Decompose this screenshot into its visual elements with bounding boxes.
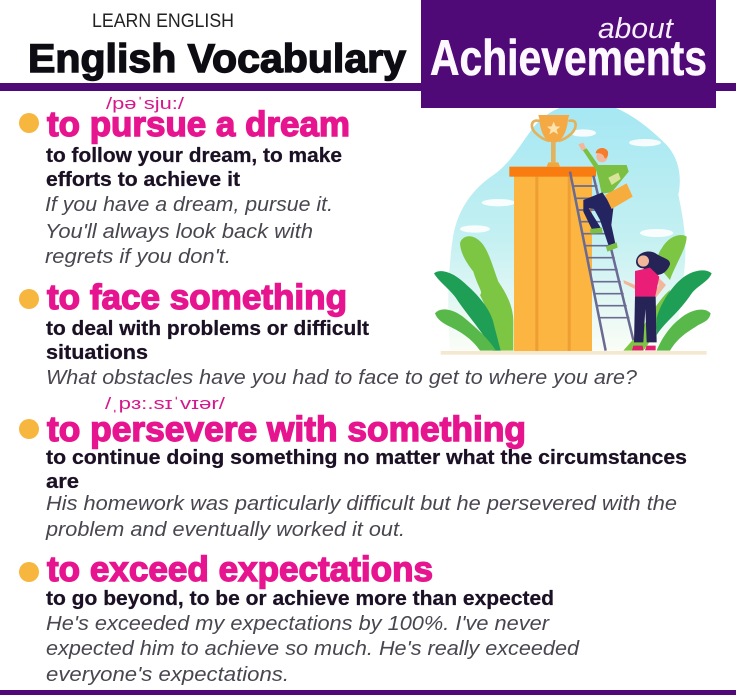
example: expected him to achieve so much. He's really exceeded xyxy=(46,638,580,660)
title panel: Achievements xyxy=(421,0,716,108)
example: regrets if you don't. xyxy=(45,246,231,268)
definition: situations xyxy=(46,342,148,364)
term: to exceed expectations xyxy=(47,550,433,589)
woman standing xyxy=(623,252,670,350)
definition xyxy=(46,318,369,364)
definition xyxy=(46,447,687,493)
clouds xyxy=(460,129,673,237)
column xyxy=(514,176,592,351)
example: problem and eventually worked it out. xyxy=(45,519,405,541)
term: to pursue a dream xyxy=(47,105,350,144)
illustration: climbing to the trophy xyxy=(434,102,712,355)
example: If you have a dream, pursue it. xyxy=(45,194,333,216)
entry: to exceed expectations xyxy=(19,550,580,686)
bullet xyxy=(19,419,39,439)
right plants xyxy=(623,235,712,351)
entry: to face something xyxy=(19,278,638,389)
entry: to pursue a dream xyxy=(19,94,350,268)
example xyxy=(45,194,333,268)
ladder xyxy=(570,172,633,351)
sky blob xyxy=(448,102,685,351)
example: His homework was particularly difficult but he persevered with the xyxy=(46,493,677,515)
example: He's exceeded my expectations by 100%. I've never xyxy=(46,613,550,635)
header rule xyxy=(0,83,736,91)
man climbing xyxy=(578,143,633,252)
example: everyone's expectations. xyxy=(46,664,289,686)
phonetic: /ˌpɜ:.sɪˈvɪər/ xyxy=(105,394,225,413)
term: to face something xyxy=(47,278,347,317)
left plants xyxy=(434,236,513,351)
example xyxy=(45,493,677,541)
definition xyxy=(46,145,342,191)
definition: are xyxy=(46,471,79,493)
example xyxy=(46,613,580,686)
heading: Learn English: LEARN ENGLISH xyxy=(92,11,234,32)
bullet xyxy=(19,113,39,133)
bullet xyxy=(19,562,39,582)
example: What obstacles have you had to face to get to where you are? xyxy=(46,367,638,389)
ground xyxy=(441,351,707,355)
definition: to continue doing something no matter what the circumstances xyxy=(46,447,687,469)
definition: to deal with problems or difficult xyxy=(46,318,369,340)
phonetic: /pəˈsju:/ xyxy=(106,94,184,113)
column cap xyxy=(509,167,596,177)
definition: to go beyond, to be or achieve more than expected xyxy=(46,588,554,610)
definition: efforts to achieve it xyxy=(46,169,240,191)
footer rule xyxy=(0,690,736,695)
icon: trophy xyxy=(532,115,576,167)
bullet xyxy=(19,289,39,309)
term: to persevere with something xyxy=(47,410,526,449)
heading: English Vocabulary: English Vocabulary xyxy=(28,37,407,81)
script word: about: about xyxy=(598,13,675,45)
example: You'll always look back with xyxy=(45,221,313,243)
entry: to persevere with something xyxy=(19,394,687,541)
definition: to follow your dream, to make xyxy=(46,145,342,167)
